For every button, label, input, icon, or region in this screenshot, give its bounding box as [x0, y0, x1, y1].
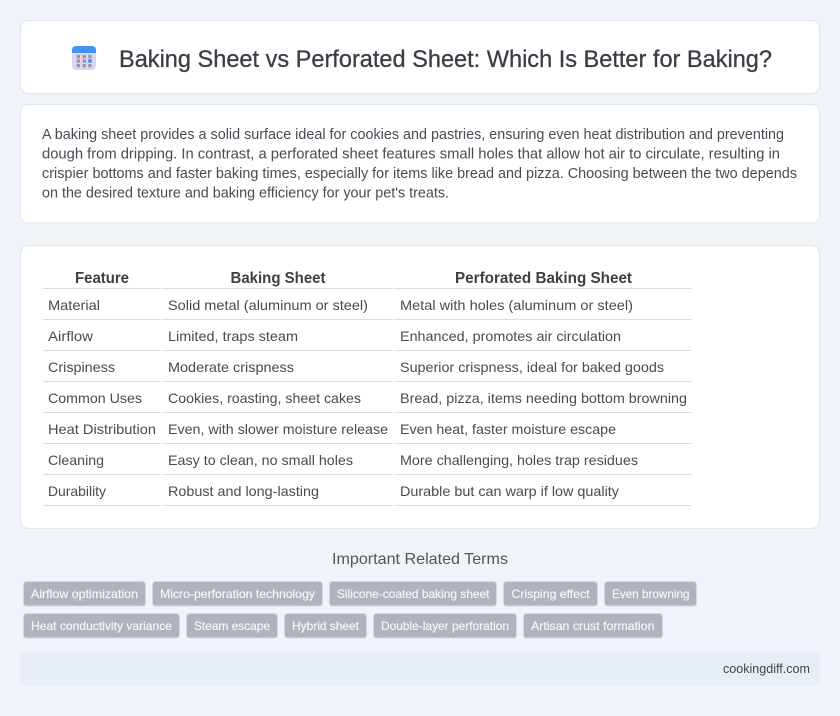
- tag: even browning: [604, 582, 696, 606]
- row: cleaning: [48, 452, 638, 468]
- intro text: A baking sheet provides a solid surface ideal for cookies and pastries, ensuring even heat distribution and preventing: [42, 127, 784, 143]
- row: crispiness: [48, 359, 664, 375]
- panel: intro paragraph: [20, 104, 820, 223]
- row: common uses: Common Uses: [48, 390, 142, 406]
- intro text: dough from dripping. In contrast, a perforated sheet features small holes that allow hot air to circulate, resulting in: [42, 146, 780, 162]
- table rules: [43, 288, 692, 506]
- tag: airflow optimization: [24, 582, 146, 606]
- title: Baking Sheet vs Perforated Sheet: Which Is Better for Baking?: [119, 46, 772, 73]
- tag: heat conductivity variance: Heat conductivity variance: [31, 619, 172, 633]
- related terms heading: Important Related Terms: [332, 551, 508, 568]
- tag: artisan crust formation: [524, 614, 662, 638]
- row: heat distribution: Even heat, faster moisture escape: [400, 421, 616, 437]
- tag: silicone-coated baking sheet: Silicone-coated baking sheet: [337, 587, 490, 601]
- row: material: Material: [48, 297, 100, 313]
- row: material: Solid metal (aluminum or steel): [168, 297, 368, 313]
- tag: double-layer perforation: Double-layer perforation: [381, 619, 509, 633]
- row: material: [48, 297, 633, 313]
- related term tags: [24, 582, 696, 638]
- row: airflow: [48, 328, 621, 344]
- tag: even browning: Even browning: [612, 587, 690, 601]
- tag: artisan crust formation: Artisan crust formation: [531, 619, 654, 633]
- tag: silicone-coated baking sheet: [330, 582, 496, 606]
- tag: micro-perforation technology: [152, 582, 322, 606]
- row: heat distribution: Heat Distribution: [48, 421, 156, 437]
- intro text: [42, 127, 797, 202]
- row: crispiness: Superior crispness, ideal for baked goods: [400, 359, 664, 375]
- row: durability: Durability: [48, 483, 106, 499]
- tag: hybrid sheet: [284, 614, 366, 638]
- tag: crisping effect: [504, 582, 598, 606]
- tag: airflow optimization: Airflow optimization: [31, 587, 138, 601]
- table header row: Perforated Baking Sheet: [455, 270, 633, 287]
- tag: double-layer perforation: [374, 614, 516, 638]
- row: cleaning: More challenging, holes trap residues: [400, 452, 638, 468]
- tag: hybrid sheet: Hybrid sheet: [292, 619, 360, 633]
- tag: steam escape: [186, 614, 278, 638]
- row: material: Metal with holes (aluminum or steel): [400, 297, 633, 313]
- row: airflow: Limited, traps steam: [168, 328, 298, 344]
- icon: calendar tray: [72, 46, 96, 70]
- row: common uses: Cookies, roasting, sheet cakes: [168, 390, 361, 406]
- row: crispiness: Moderate crispness: [168, 359, 294, 375]
- tag: micro-perforation technology: Micro-perforation technology: [160, 587, 315, 601]
- row: heat distribution: Even, with slower moisture release: [168, 421, 388, 437]
- footer bar: [20, 652, 820, 686]
- tag: crisping effect: Crisping effect: [512, 587, 590, 601]
- footer source: cookingdiff.com: [723, 661, 810, 676]
- intro text: crispier bottoms and faster baking times, especially for items like bread and pizza. Choosing between the two depends: [42, 166, 797, 182]
- row: durability: Durable but can warp if low quality: [400, 483, 619, 499]
- row: airflow: Enhanced, promotes air circulation: [400, 328, 621, 344]
- row: durability: Robust and long-lasting: [168, 483, 319, 499]
- row: heat distribution: [48, 421, 616, 437]
- tag: steam escape: Steam escape: [194, 619, 270, 633]
- row: common uses: Bread, pizza, items needing bottom browning: [400, 390, 687, 406]
- table header row: [75, 270, 633, 287]
- header panel: [20, 20, 820, 94]
- row: cleaning: Easy to clean, no small holes: [168, 452, 353, 468]
- row: durability: [48, 483, 619, 499]
- tag: heat conductivity variance: [24, 614, 180, 638]
- panel: comparison table: [20, 246, 820, 528]
- intro text: on the desired texture and baking efficiency for your pet's treats.: [42, 186, 449, 202]
- row: cleaning: Cleaning: [48, 452, 104, 468]
- table header row: Feature: [75, 270, 129, 287]
- row: common uses: [48, 390, 687, 406]
- row: airflow: Airflow: [48, 328, 94, 344]
- table header row: Baking Sheet: [230, 270, 326, 287]
- row: crispiness: Crispiness: [48, 359, 115, 375]
